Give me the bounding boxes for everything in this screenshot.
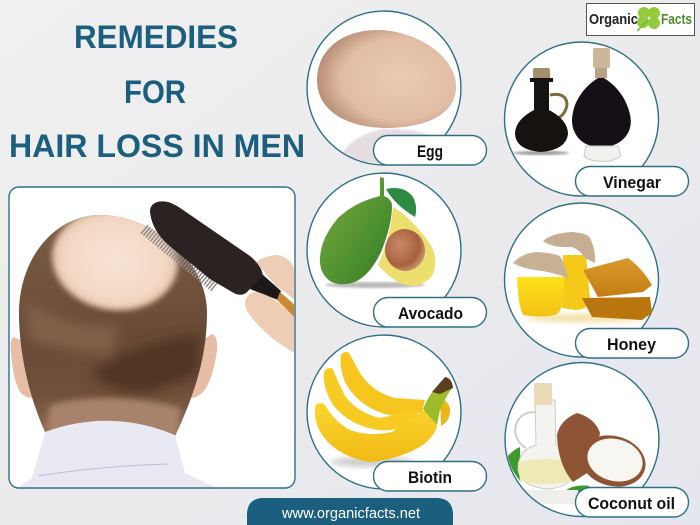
- label: biotin: [374, 462, 486, 491]
- title: FOR: [124, 74, 186, 110]
- icon: leaf: [386, 188, 416, 217]
- label: honey: [576, 328, 688, 358]
- logo: Organic: [589, 11, 638, 28]
- title: REMEDIES: [74, 19, 238, 55]
- label: honey: Honey: [607, 335, 657, 354]
- label: coconut oil: [576, 488, 688, 517]
- icon: drop bottle: [572, 48, 631, 161]
- footer website bar: [247, 498, 453, 525]
- panel: coconut oil: [505, 362, 659, 516]
- logo: Facts: [661, 11, 692, 28]
- title: HAIR LOSS IN MEN: [9, 128, 305, 164]
- icon: front honey jar: [513, 252, 568, 316]
- icon: egg reflection: [342, 128, 431, 164]
- icon: brush head: [150, 201, 263, 295]
- icon: honeycomb: [582, 258, 652, 320]
- label: avocado: [374, 298, 486, 327]
- icon: brush handle: [250, 274, 281, 300]
- icon: jug bottle: [513, 68, 569, 155]
- panel: honey: [504, 203, 658, 357]
- panel: avocado: [307, 173, 461, 327]
- icon: oil jug: [515, 383, 575, 489]
- icon: leaves: [507, 447, 521, 482]
- panel: egg: [307, 11, 461, 170]
- icon: clover: [637, 7, 660, 31]
- icon: shirt: [17, 421, 217, 488]
- icon: hand upper finger: [256, 255, 295, 300]
- panel: bald head photo: [9, 187, 295, 488]
- icon: bald scalp: [48, 215, 182, 314]
- icon: banana shadow: [330, 457, 414, 467]
- icon: coconut half: [586, 435, 646, 487]
- icon: avocado seed: [380, 225, 430, 275]
- icon: banana bunch: [315, 352, 453, 462]
- icon: avocado whole: [320, 177, 392, 284]
- icon: avocado half: [378, 207, 435, 286]
- icon: coconut whole: [557, 413, 600, 482]
- icon: back honey jar: [543, 232, 595, 310]
- icon: jug reflection: [520, 490, 578, 504]
- icon: hair: [19, 215, 207, 436]
- label: egg: Egg: [417, 142, 443, 161]
- logo: [586, 4, 694, 36]
- title: [9, 19, 305, 164]
- icon: honey shadow: [525, 314, 645, 322]
- label: biotin: Biotin: [408, 468, 452, 487]
- label: vinegar: [576, 166, 688, 196]
- icon: hand lower finger: [245, 292, 295, 353]
- icon: avocado shadow: [325, 282, 425, 288]
- icon: brush bristles: [144, 229, 216, 288]
- icon: ears: [10, 334, 217, 398]
- panel: bananas: [307, 335, 461, 489]
- footer website bar: www.organicfacts.net: [281, 505, 421, 522]
- label: coconut oil: Coconut oil: [588, 494, 675, 513]
- icon: egg: [317, 30, 456, 128]
- label: egg: [374, 136, 486, 165]
- panel: vinegar: [504, 42, 658, 196]
- label: vinegar: Vinegar: [603, 173, 661, 192]
- label: avocado: Avocado: [398, 304, 463, 323]
- icon: banana stem: [423, 388, 452, 425]
